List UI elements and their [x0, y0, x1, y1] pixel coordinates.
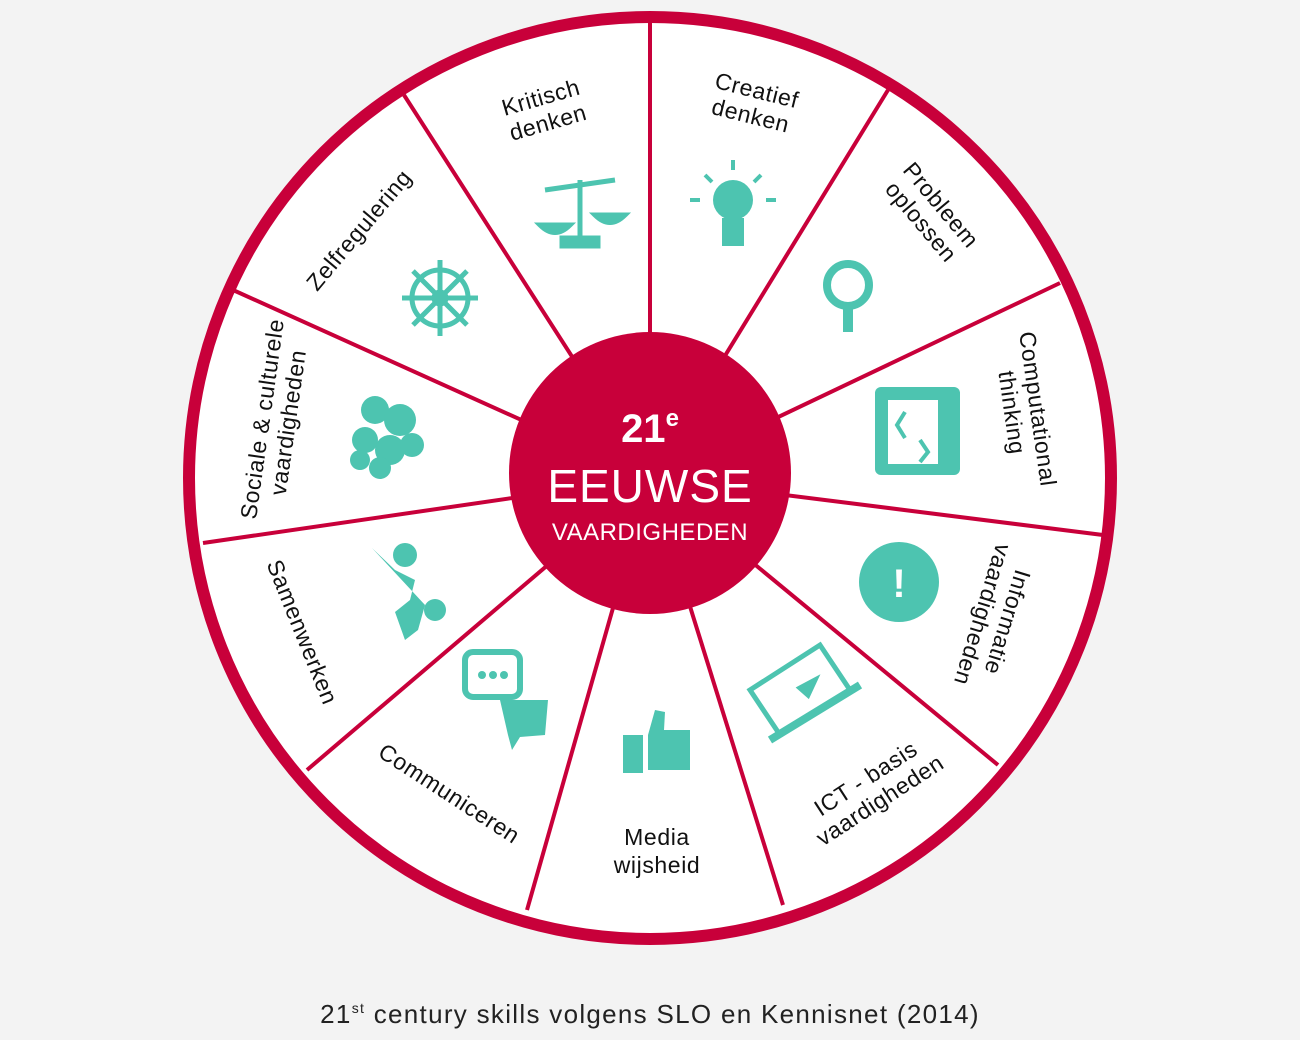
icon: ship wheel — [402, 260, 478, 336]
icon: info circle — [859, 542, 939, 622]
segment labels — [235, 67, 1062, 878]
segment labels: vaardigheden — [949, 541, 1017, 689]
icons — [350, 160, 960, 773]
segment labels: Kritisch — [499, 74, 583, 121]
icon: info circle: ! — [892, 562, 906, 606]
center circle: 21e eeuwse vaardigheden: e — [666, 405, 679, 432]
caption: st — [352, 1000, 365, 1016]
segment labels: Sociale & culturele — [235, 317, 289, 521]
center circle: 21e eeuwse vaardigheden: EEUWSE — [547, 460, 753, 512]
segment labels: Computational — [1014, 330, 1062, 488]
segment labels: oplossen — [880, 176, 962, 267]
center circle: 21e eeuwse vaardigheden: VAARDIGHEDEN — [552, 519, 748, 546]
icon: scales — [540, 180, 625, 246]
segment labels: denken — [709, 93, 792, 138]
segment labels: denken — [506, 99, 590, 146]
center circle: 21e eeuwse vaardigheden — [509, 332, 791, 614]
segment labels: Zelfregulering — [301, 164, 417, 295]
segment labels: Media — [624, 824, 690, 850]
segment labels: thinking — [993, 369, 1031, 456]
segment labels: Probleem — [898, 157, 984, 253]
segment labels: Informatie — [979, 567, 1036, 678]
icon: laptop — [750, 645, 860, 740]
icon: collaboration — [372, 543, 446, 640]
icon: thumbs up — [623, 710, 690, 773]
icon: magnifier — [827, 264, 869, 332]
wheel: outer ring and segments — [189, 17, 1111, 939]
icon: code window — [875, 387, 960, 475]
center circle: 21e eeuwse vaardigheden: 21 — [621, 407, 666, 451]
icon: lightbulb — [690, 160, 776, 246]
icon: chat bubbles — [465, 652, 548, 750]
segment labels: ICT - basis — [809, 735, 922, 821]
segment labels: Communiceren — [374, 738, 525, 849]
segment labels: vaardigheden — [265, 348, 311, 497]
segment labels: vaardigheden — [811, 749, 948, 851]
segment labels: Samenwerken — [262, 556, 343, 708]
icon: people cluster — [350, 396, 424, 479]
caption: century skills volgens SLO en Kennisnet (2014) — [365, 999, 980, 1029]
segment labels: Creatief — [712, 67, 801, 113]
caption: 21 — [320, 999, 352, 1029]
segment labels: wijsheid — [613, 852, 700, 878]
